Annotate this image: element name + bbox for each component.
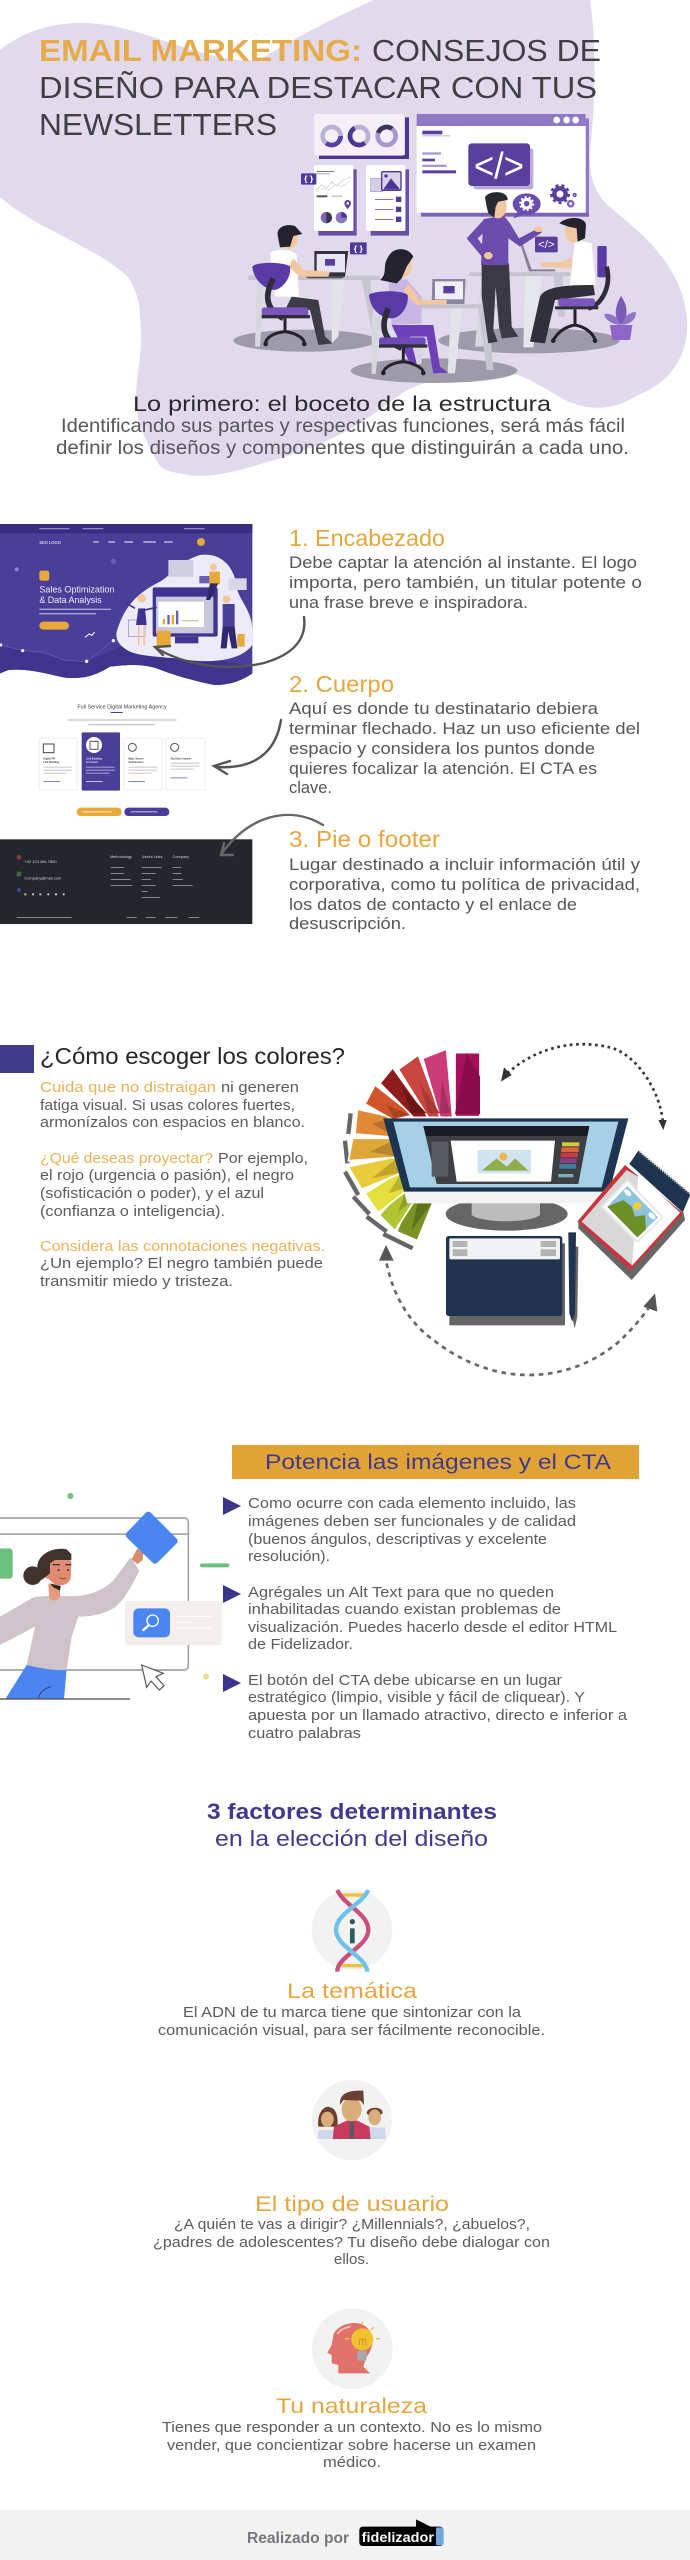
icon: blue diamond tile <box>129 1515 174 1560</box>
email screenshot: dark footer: Useful Links <box>142 855 163 859</box>
panel: image list card <box>366 165 409 236</box>
service card 2 <box>82 732 120 791</box>
text block: colour advice: armonízalos con espacios en blanco. <box>40 1114 305 1131</box>
panel: code window <box>417 114 589 218</box>
step 1: encabezado: 1. Encabezado <box>289 525 445 551</box>
text block: colour advice: fatiga visual. Si usas colores fuertes, <box>40 1097 295 1114</box>
icon: potted plant <box>604 296 636 340</box>
email screenshot: dark footer: Company <box>173 855 189 859</box>
text block: colour advice <box>40 1079 325 1290</box>
text block: colour advice: el rojo (urgencia o pasión), el negro <box>40 1167 294 1184</box>
stylus pen <box>568 1232 578 1328</box>
tables and laptops <box>248 243 570 374</box>
factor 2: el tipo de usuario: El tipo de usuario <box>255 2193 449 2216</box>
factor 2: el tipo de usuario: ellos. <box>334 2252 369 2268</box>
icon: head with light bulb <box>312 2308 393 2389</box>
computer monitor <box>383 1118 628 1231</box>
factor 2: el tipo de usuario <box>153 2193 550 2268</box>
service card 1: Digital PR <box>43 757 55 760</box>
factor 1: la temática <box>158 1980 545 2039</box>
arrow: footer text to footer screenshot <box>221 815 323 855</box>
bullet 3: El botón del CTA debe ubicarse en un lugar <box>248 1672 562 1689</box>
step 2: cuerpo: terminar flechado. Haz un uso eficiente del <box>289 719 640 738</box>
title <box>39 33 601 142</box>
service card 4 <box>166 738 205 790</box>
factor 3: tu naturaleza: médico. <box>323 2455 381 2471</box>
banner heading: boost images and CTA <box>232 1445 639 1479</box>
logo: fidelizador <box>359 2519 443 2546</box>
step 2: cuerpo: clave. <box>289 778 332 797</box>
person: seated woman in the centre <box>369 249 448 375</box>
step 1: encabezado: una frase breve e inspiradora. <box>289 593 528 612</box>
bullet 3: apuesta por un llamado atractivo, directo e inferior a <box>248 1707 628 1724</box>
step 3: pie o footer <box>289 826 641 933</box>
step 3: pie o footer: los datos de contacto y el enlace de <box>289 895 577 914</box>
email screenshot: body with service cards <box>39 704 205 816</box>
person: seated man on the left <box>252 225 332 346</box>
email screenshot: header hero <box>0 524 252 685</box>
woman interacting with interface illustration <box>0 1493 229 1700</box>
title: DISEÑO PARA DESTACAR CON TUS <box>39 70 597 105</box>
email screenshot: dark footer: Methodology <box>110 855 132 859</box>
step 1: encabezado: importa, pero también, un titular potente o <box>289 573 642 592</box>
email screenshot: header hero: & Data Analysis <box>39 595 102 605</box>
email screenshot: dark footer: Company@mail.com <box>24 875 62 880</box>
panel: donut charts card <box>314 114 409 159</box>
step 2: cuerpo: quieres focalizar la atención. El CTA es <box>289 759 597 778</box>
service card 3: Maps Search <box>128 757 144 760</box>
bullet 1: resolución). <box>248 1548 330 1565</box>
dashed cycle arrows <box>379 1044 667 1375</box>
step 3: pie o footer: desuscripción. <box>289 914 406 933</box>
text block: colour advice: transmitir miedo y tristeza. <box>40 1273 233 1290</box>
bullet 3 <box>223 1672 628 1742</box>
factor 1: la temática: El ADN de tu marca tiene que sintonizar con la <box>183 2005 522 2021</box>
factor 1: la temática: La temática <box>287 1980 417 2003</box>
text block: colour advice: Por ejemplo, <box>218 1150 308 1167</box>
title: EMAIL MARKETING: <box>39 33 362 68</box>
step 3: pie o footer: 3. Pie o footer <box>289 826 440 852</box>
graphics tablet <box>446 1236 565 1325</box>
panel: line chart card <box>314 165 357 236</box>
step 1: encabezado <box>289 525 642 612</box>
text block: colour advice: (sofisticación o poder), y el azul <box>40 1185 264 1202</box>
bullet 2: de Fidelizador. <box>248 1636 353 1653</box>
footer credit band: Realizado por <box>247 2530 349 2547</box>
step 2: cuerpo: espacio y considera los puntos donde <box>289 739 595 758</box>
text block: colour advice: ¿Un ejemplo? El negro también puede <box>40 1255 323 1272</box>
icon: code brackets <box>301 173 316 185</box>
email screenshot: dark footer <box>0 839 252 924</box>
section intro: first the structure sketch <box>56 392 629 459</box>
factor 3: tu naturaleza: vender, que concientizar sobre hacerse un examen <box>167 2438 536 2454</box>
title: NEWSLETTERS <box>39 107 277 142</box>
email screenshot: body with service cards: Full Service Digital Marketing Agency <box>77 704 167 710</box>
service card 3: Optimization <box>128 761 144 764</box>
bullet 1: imágenes deben ser funcionales y de calidad <box>248 1513 576 1530</box>
section intro: first the structure sketch: Identificando sus partes y respectivas funciones, será más fácil <box>61 416 625 437</box>
colour swatch fan <box>345 1049 480 1248</box>
section intro: first the structure sketch: definir los diseños y componentes que distinguirán a cada uno. <box>56 438 629 459</box>
bullet 1: (buenos ángulos, descriptivas y excelente <box>248 1531 547 1548</box>
heading: 3 determining factors <box>207 1799 497 1851</box>
bullet 2 <box>223 1584 617 1653</box>
heading: 3 determining factors: 3 factores determinantes <box>207 1799 497 1824</box>
factor 3: tu naturaleza: Tienes que responder a un contexto. No es lo mismo <box>162 2420 542 2436</box>
panel: code window: </> <box>474 144 524 186</box>
email screenshot: header hero: SEO LOGO <box>39 540 62 545</box>
step 3: pie o footer: Lugar destinado a incluir información útil y <box>289 855 641 874</box>
title: CONSEJOS DE <box>372 33 601 68</box>
step 2: cuerpo: 2. Cuerpo <box>289 671 394 697</box>
heading: 3 determining factors: en la elección del diseño <box>215 1826 488 1851</box>
icon: DNA helix <box>312 1890 392 1972</box>
step 2: cuerpo <box>289 671 640 797</box>
service card 2: Link Building <box>86 757 102 760</box>
bullet 2: visualización. Puedes hacerlo desde el editor HTML <box>248 1619 617 1636</box>
step 2: cuerpo: Aquí es donde tu destinatario debiera <box>289 699 599 718</box>
text block: colour advice: Cuida que no distraigan <box>40 1079 216 1096</box>
service card 4: Big Data Analysis <box>171 757 192 760</box>
bullet 3: estratégico (limpio, visible y fácil de cliquear). Y <box>248 1689 585 1706</box>
hero illustration: team working with interface screens <box>233 114 636 383</box>
arrow: body text to body screenshot <box>214 720 281 774</box>
step 3: pie o footer: corporativa, como tu política de privacidad, <box>289 875 640 894</box>
bullet list: images and CTA <box>223 1495 628 1742</box>
factor 3: tu naturaleza: Tu naturaleza <box>276 2395 427 2418</box>
person: seated man on the right <box>530 218 608 343</box>
text block: colour advice: ¿Qué deseas proyectar? <box>40 1150 213 1167</box>
heading: how to choose colours: ¿Cómo escoger los colores? <box>40 1043 345 1069</box>
icon: small code tag <box>535 237 558 252</box>
icon: small code tag: </> <box>538 239 555 251</box>
bullet 1 <box>223 1495 576 1565</box>
factor 1: la temática: comunicación visual, para ser fácilmente reconocible. <box>158 2023 545 2039</box>
text block: colour advice: ni generen <box>221 1079 299 1096</box>
icon: code brackets: { } <box>354 243 364 253</box>
arrow: header text to header screenshot <box>155 617 304 667</box>
factor 2: el tipo de usuario: ¿padres de adolescentes? Tu diseño debe dialogar con <box>153 2235 550 2251</box>
service card 3 <box>124 738 162 790</box>
bullet 2: Agrégales un Alt Text para que no queden <box>248 1584 554 1601</box>
email screenshot: dark footer: +32 123 456 7890 <box>24 859 57 864</box>
text block: colour advice: Considera las connotaciones negativas. <box>40 1238 325 1255</box>
bullet 2: inhabilitadas cuando existan problemas de <box>248 1601 561 1618</box>
email screenshot: header hero: Sales Optimization <box>39 585 114 595</box>
search card <box>125 1601 222 1645</box>
factor 3: tu naturaleza <box>162 2395 542 2471</box>
service card 1 <box>39 738 77 790</box>
text block: colour advice: (confianza o inteligencia). <box>40 1203 225 1220</box>
heading marker square <box>0 1045 34 1073</box>
section intro: first the structure sketch: Lo primero: el boceto de la estructura <box>133 392 551 416</box>
service card 1: Link Building <box>43 761 60 764</box>
icon: group of users <box>312 2080 392 2160</box>
bullet 3: cuatro palabras <box>248 1725 361 1742</box>
footer credit band <box>0 2510 690 2560</box>
service card 2: & Content <box>86 761 98 764</box>
step 1: encabezado: Debe captar la atención al instante. El logo <box>289 553 637 572</box>
background blob <box>0 0 687 476</box>
bullet 1: Como ocurre con cada elemento incluido, las <box>248 1495 576 1512</box>
factor 2: el tipo de usuario: ¿A quién te vas a dirigir? ¿Millennials?, ¿abuelos?, <box>174 2217 530 2233</box>
photo notebook <box>577 1151 690 1280</box>
banner heading: boost images and CTA: Potencia las imágenes y el CTA <box>265 1450 612 1474</box>
icon: mouse cursor <box>142 1665 164 1690</box>
person: standing man <box>467 192 543 343</box>
icon: code brackets: { } <box>304 174 314 184</box>
woman figure <box>0 1548 143 1699</box>
colour workflow illustration <box>345 1044 690 1375</box>
logo: fidelizador: fidelizador <box>362 2529 435 2545</box>
icon: code brackets <box>350 242 367 254</box>
call to action buttons <box>77 808 169 816</box>
